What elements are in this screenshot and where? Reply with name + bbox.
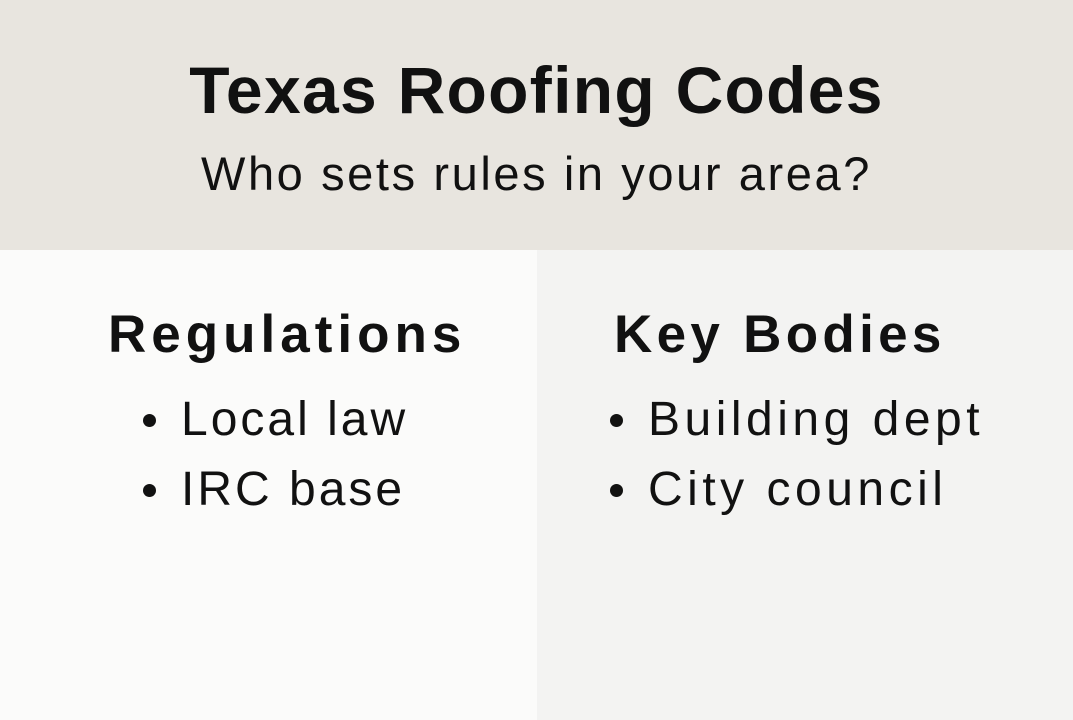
item: city council: City council [648, 463, 947, 516]
panel: regulations [0, 250, 537, 720]
list: regulations [143, 393, 408, 516]
list: key bodies [610, 393, 984, 516]
item: building dept: Building dept [648, 393, 984, 446]
heading: regulations: Regulations [108, 305, 466, 364]
heading: key bodies: Key Bodies [614, 305, 946, 364]
item: local law: Local law [181, 393, 408, 446]
subtitle: Who sets rules in your area? [201, 147, 872, 200]
header band [0, 0, 1073, 250]
item: IRC base: IRC base [181, 463, 405, 516]
title: Texas Roofing Codes [189, 53, 884, 127]
panel: key bodies [537, 250, 1073, 720]
